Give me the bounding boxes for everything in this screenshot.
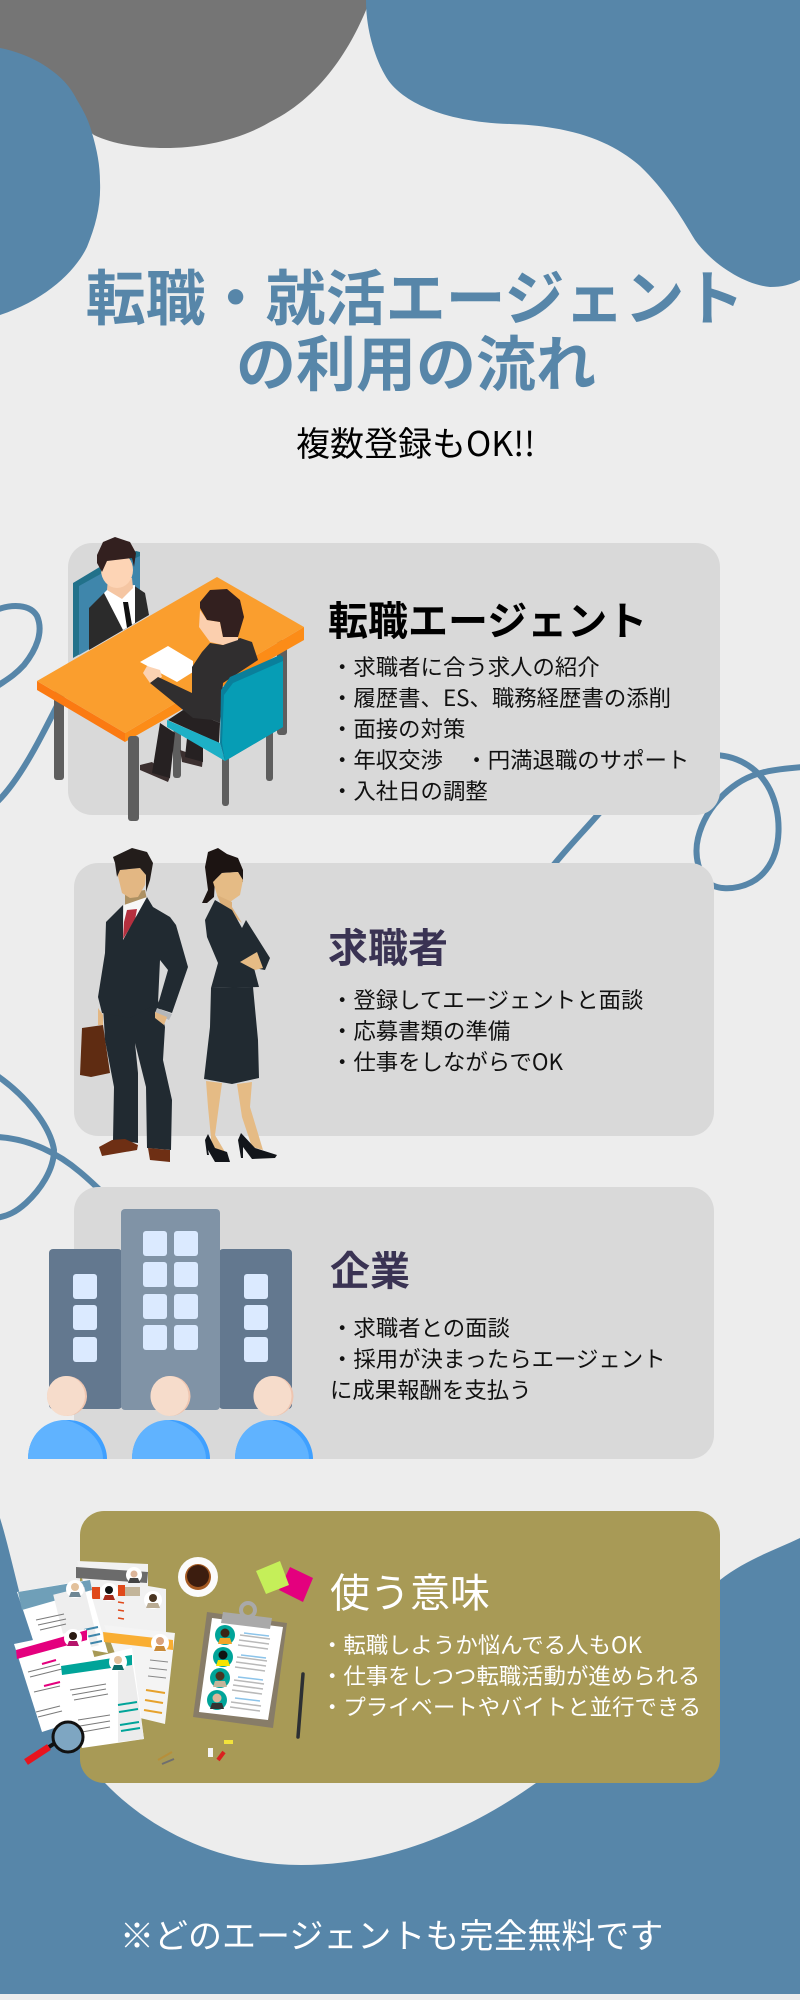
person 1 [28,1376,107,1459]
illustration: businessman and businesswoman [80,848,277,1162]
title: 転職・就活エージェント [86,251,744,338]
list: ・応募書類の準備 [331,1014,510,1046]
illustration: resumes on desk [14,1557,313,1764]
back person [89,585,149,650]
blob: blue bottom [0,1518,800,1994]
resume: blue [17,1580,108,1653]
icon: sticky notes [256,1561,313,1602]
table legs behind [54,690,64,780]
blob: grey top [0,0,370,148]
icon: coffee cup [178,1557,218,1597]
list [331,650,689,806]
list: ・転職しようか悩んでる人もOK [321,1628,643,1660]
squiggle: right [548,755,800,888]
list [331,983,643,1077]
list: ・面接の対策 [331,712,465,744]
list: ・プライベートやバイトと並行できる [321,1690,701,1722]
resume: pink [14,1629,110,1732]
panel: 求職者 [74,848,714,1162]
title [86,251,744,404]
title: の利用の流れ [236,317,596,404]
front chair back [220,655,283,761]
person 2 [132,1376,210,1459]
list: に成果報酬を支払う [330,1373,532,1405]
list: ・採用が決まったらエージェント [331,1342,666,1374]
person 3 [235,1376,313,1459]
list: ・履歴書、ES、職務経歴書の添削 [331,681,671,713]
list: ・入社日の調整 [331,774,488,806]
illustration: interview at desk [37,537,304,821]
resume: grey [76,1561,166,1640]
squiggle: left lower [0,1075,110,1218]
icon: pen [298,1674,303,1737]
table [37,681,125,742]
heading: 企業 [330,1239,410,1297]
blob: blue top right [366,0,800,287]
list: ・仕事をしながらでOK [331,1045,563,1077]
resume: teal [61,1648,144,1748]
paper [140,646,193,682]
front person [140,762,170,782]
illustration: buildings and people [28,1209,313,1459]
woman [202,848,243,903]
man [80,1025,110,1077]
list [321,1628,701,1722]
icon: magnifier [26,1722,83,1762]
panel: 企業 [28,1187,714,1459]
subtitle: 複数登録もOK!! [296,417,535,466]
list: ・年収交渉 ・円満退職のサポート [331,743,689,775]
icon: pins and clips [158,1740,233,1764]
chair legs [173,730,181,778]
squiggle: left upper [0,606,70,803]
heading: 転職エージェント [328,589,647,647]
list [330,1311,666,1405]
heading: 求職者 [328,916,448,974]
list: ・登録してエージェントと面談 [331,983,643,1015]
footer note: ※どのエージェントも完全無料です [120,1909,663,1958]
list: ・求職者との面談 [331,1311,510,1343]
back chair [73,551,140,658]
icon: clipboard [193,1603,287,1728]
heading: 使う意味 [330,1561,490,1619]
panel: 転職エージェント [37,537,720,821]
blob: blue top left [0,48,100,315]
panel: 使う意味 [14,1511,720,1783]
list: ・求職者に合う求人の紹介 [331,650,600,682]
list: ・仕事をしつつ転職活動が進められる [321,1659,700,1691]
resume: orange [103,1625,175,1724]
